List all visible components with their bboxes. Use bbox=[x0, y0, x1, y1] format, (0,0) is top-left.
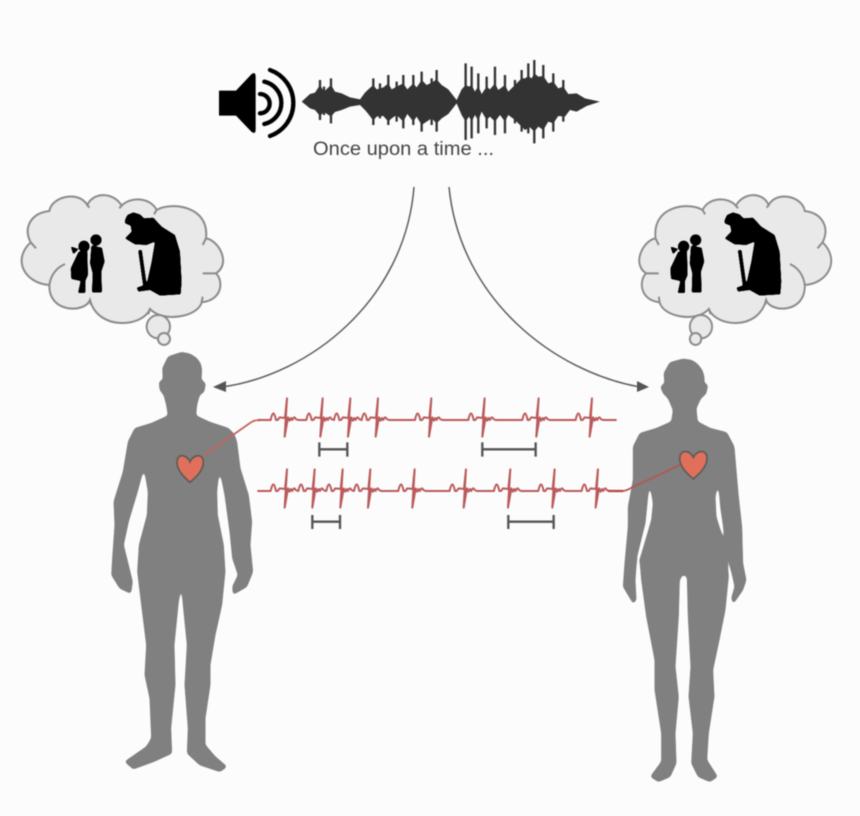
upper ECG trace bbox=[258, 398, 617, 437]
arrow: audio to right listener bbox=[449, 187, 649, 392]
icon: children and grandmother silhouettes bbox=[670, 212, 781, 296]
audio stimulus bbox=[219, 60, 600, 160]
icon: speaker bbox=[219, 70, 293, 136]
connector: male heart to upper ECG bbox=[203, 420, 260, 456]
icon: male heart bbox=[177, 456, 203, 482]
arrow: audio to left listener bbox=[213, 187, 414, 392]
connector: lower ECG to female heart bbox=[608, 464, 682, 491]
cloud outline bbox=[639, 195, 831, 345]
female body silhouette bbox=[623, 359, 746, 782]
left thought cloud bbox=[22, 195, 223, 345]
cloud outline bbox=[22, 195, 223, 345]
interval brackets bbox=[312, 442, 554, 529]
lower ECG trace bbox=[257, 469, 623, 508]
right thought cloud bbox=[639, 195, 831, 345]
male body silhouette bbox=[112, 352, 253, 772]
sound waveform bbox=[302, 60, 600, 143]
caption: Once upon a time ... bbox=[313, 139, 494, 160]
icon: female heart bbox=[680, 451, 707, 479]
icon: children and grandmother silhouettes bbox=[71, 212, 182, 296]
